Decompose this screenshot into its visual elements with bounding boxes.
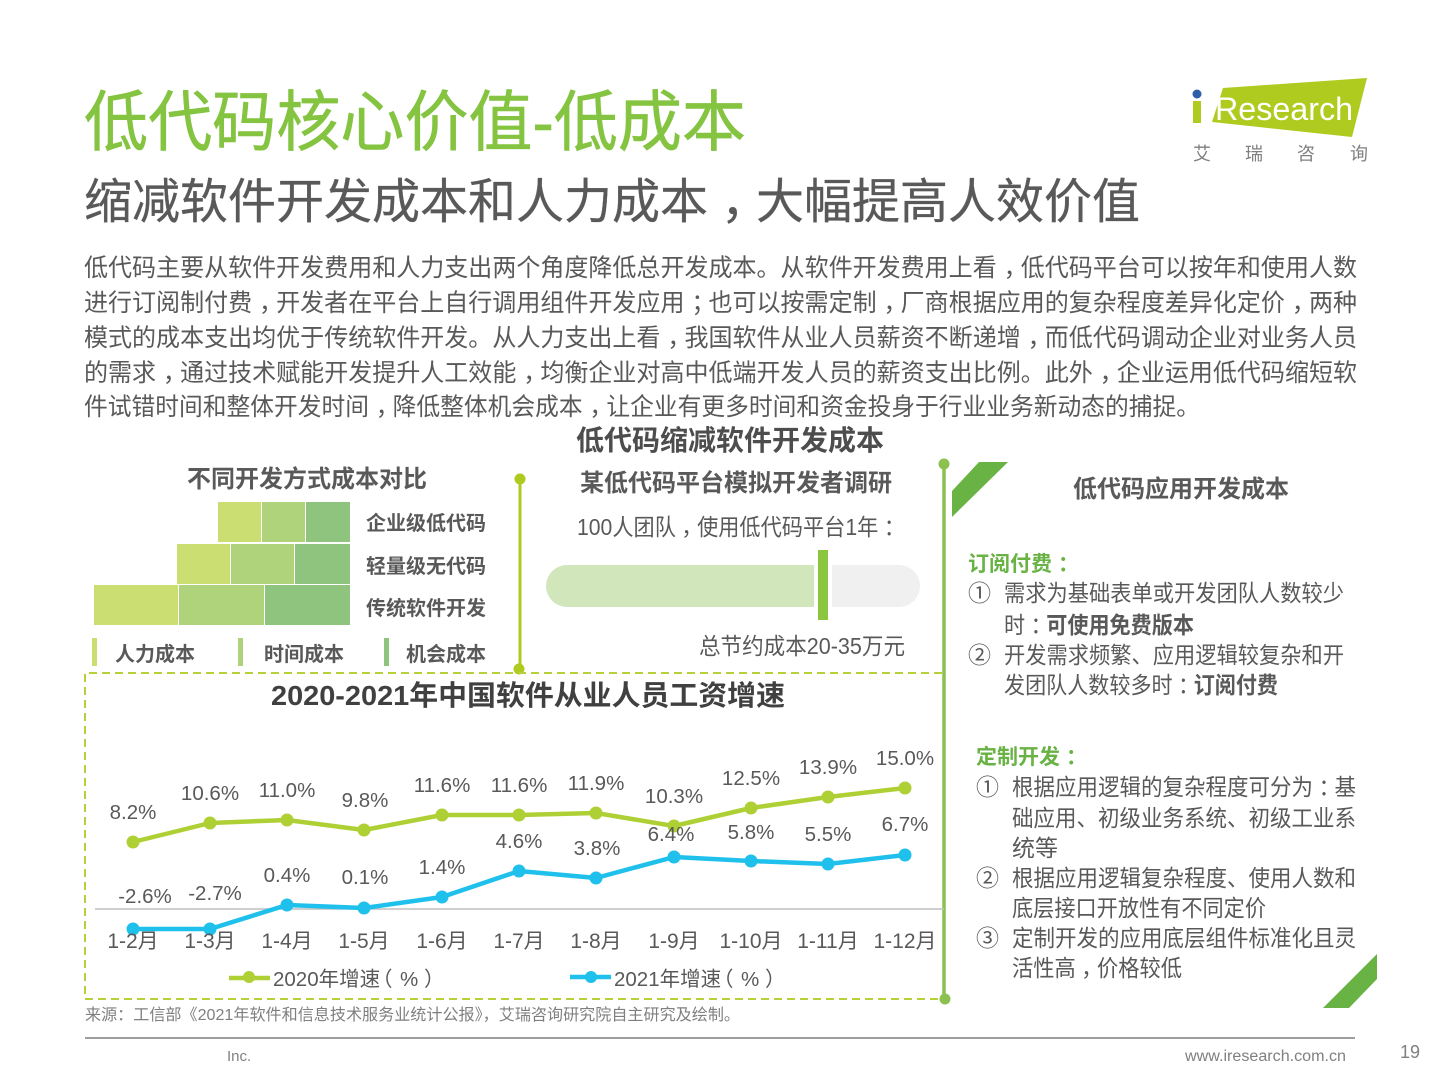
custom development section: ② xyxy=(976,865,999,891)
x axis labels: 1-5月 xyxy=(338,930,390,953)
logo: iResearch: 询 xyxy=(1350,144,1368,164)
data labels: 2020: 12.5% xyxy=(722,767,780,790)
savings label: 总节约成本20-35万元 xyxy=(699,633,905,659)
panel: salary growth chart xyxy=(85,673,944,999)
intro text block: 低代码主要从软件开发费用和人力支出两个角度降低总开发成本。从软件开发费用上看，低代码平台可以按年和使用人数 xyxy=(84,254,1357,282)
custom development section: 活性高，价格较低 xyxy=(1012,955,1182,981)
x axis labels: 1-10月 xyxy=(719,930,783,953)
panel: developer survey xyxy=(546,469,920,659)
logo: iResearch: Research xyxy=(1215,91,1353,127)
line: 2020 xyxy=(126,782,912,848)
data labels: 2020: 11.9% xyxy=(568,772,624,795)
x axis labels: 1-2月 xyxy=(107,930,159,953)
intro text block: 的需求，通过技术赋能开发提升人工效能，均衡企业对高中低端开发人员的薪资支出比例。此外，企业运用低代码缩短软 xyxy=(84,359,1357,387)
divider: left vertical xyxy=(514,474,526,674)
heading: application cost: 低代码应用开发成本 xyxy=(1073,476,1289,503)
legend: 2021: 2021年增速 xyxy=(614,968,721,991)
x axis labels: 1-3月 xyxy=(184,930,236,953)
x axis labels: 1-8月 xyxy=(570,930,622,953)
footer: website: www.iresearch.com.cn xyxy=(1184,1048,1346,1065)
stacked blocks: traditional development xyxy=(94,585,350,625)
x axis labels: 1-9月 xyxy=(648,930,700,953)
data labels: 2021: -2.7% xyxy=(188,882,242,905)
data labels: 2020: 10.3% xyxy=(645,785,703,808)
logo: iResearch: 艾 xyxy=(1193,144,1211,164)
legend: 2020 xyxy=(229,968,444,991)
legend: cost types: 机会成本 xyxy=(406,642,486,666)
x axis labels xyxy=(107,930,937,953)
data labels: 2020: 9.8% xyxy=(342,789,388,812)
data labels: 2021: 6.7% xyxy=(882,813,928,836)
logo: iResearch: 瑞 xyxy=(1245,144,1263,164)
subscription section: ① xyxy=(968,580,991,606)
data labels: 2021: 0.4% xyxy=(264,864,310,887)
x axis labels: 1-4月 xyxy=(261,930,313,953)
legend: 2020: 2020年增速 xyxy=(273,968,380,991)
legend: cost types: 时间成本 xyxy=(264,642,344,666)
intro text block xyxy=(84,254,1357,421)
legend: cost types: 人力成本 xyxy=(115,642,195,666)
data labels: 2020: 11.6% xyxy=(414,774,470,797)
row labels: 轻量级无代码 xyxy=(366,555,486,578)
custom development section xyxy=(976,745,1356,981)
subscription section: 开发需求频繁、应用逻辑较复杂和开 xyxy=(1004,642,1344,668)
data labels: 2020: 8.2% xyxy=(110,801,156,824)
data labels: 2021: 6.4% xyxy=(648,823,694,846)
data labels: 2021: 5.8% xyxy=(728,821,774,844)
custom development section: ① xyxy=(976,774,999,800)
intro text block: 件试错时间和整体开发时间，降低整体机会成本，让企业有更多时间和资金投身于行业业务新动态的捕捉。 xyxy=(84,393,1200,421)
corner accent: bottom xyxy=(1323,954,1377,1008)
stacked blocks: enterprise low code xyxy=(218,502,350,542)
legend: 2021 xyxy=(570,968,786,991)
legend: cost types xyxy=(92,638,486,666)
subscription section: 需求为基础表单或开发团队人数较少 xyxy=(1004,580,1344,606)
axis line xyxy=(95,908,944,910)
survey condition: 100人团队，使用低代码平台1年： xyxy=(577,514,905,540)
custom development section: 统等 xyxy=(1012,835,1058,861)
page number: 19 xyxy=(1400,1042,1420,1062)
custom development section: 础应用、初级业务系统、初级工业系 xyxy=(1012,805,1356,831)
row labels: 企业级低代码 xyxy=(366,511,486,535)
data labels: 2021: 5.5% xyxy=(805,823,851,846)
data labels: 2020: 11.6% xyxy=(491,774,547,797)
legend: 2021: （ xyxy=(713,968,734,991)
intro text block: 进行订阅制付费，开发者在平台上自行调用组件开发应用；也可以按需定制，厂商根据应用的复杂程度差异化定价，两种 xyxy=(84,289,1357,317)
subtitle: 缩减软件开发成本和人力成本 ，大幅提高人效价值 xyxy=(84,176,1140,229)
legend: 2021: % xyxy=(741,968,759,991)
progress bar xyxy=(546,550,920,620)
data labels: 2020 xyxy=(110,747,934,824)
data labels: 2020: 10.6% xyxy=(181,782,239,805)
data labels: 2020: 15.0% xyxy=(876,747,934,770)
corner accent: top xyxy=(952,462,1008,517)
data labels: 2021: 3.8% xyxy=(574,837,620,860)
heading: survey: 某低代码平台模拟开发者调研 xyxy=(580,469,892,497)
legend: 2020: ） xyxy=(424,968,444,991)
heading: cost reduction: 低代码缩减软件开发成本 xyxy=(576,425,884,456)
custom development section: 定制开发的应用底层组件标准化且灵 xyxy=(1012,925,1356,951)
data labels: 2021: 4.6% xyxy=(496,830,542,853)
intro text block: 模式的成本支出均优于传统软件开发。从人力支出上看，我国软件从业人员薪资不断递增，而低代码调动企业对业务人员 xyxy=(84,324,1357,352)
row labels xyxy=(366,511,486,620)
logo: iResearch: 咨 xyxy=(1297,144,1315,164)
custom development section: ③ xyxy=(976,925,999,951)
custom development section: 根据应用逻辑的复杂程度可分为：基 xyxy=(1012,774,1356,800)
data labels: 2021 xyxy=(118,813,928,908)
title: 低代码核心价值-低成本 xyxy=(84,85,746,159)
footer rule xyxy=(85,1037,1355,1039)
stacked blocks: lightweight no code xyxy=(177,544,350,584)
footer: company: Inc. xyxy=(227,1048,251,1065)
subscription section: 时：可使用免费版本 xyxy=(1004,612,1194,638)
legend: 2020: （ xyxy=(372,968,392,991)
divider: right vertical xyxy=(938,458,950,1004)
legend: 2020: % xyxy=(400,968,418,991)
data labels: 2020: 11.0% xyxy=(259,779,315,802)
data labels: 2021: 0.1% xyxy=(342,866,388,889)
line: 2021 xyxy=(126,848,912,936)
custom development section: 定制开发 ： xyxy=(976,745,1087,769)
subscription section: 发团队人数较多时：订阅付费 xyxy=(1004,672,1278,698)
subscription section: 订阅付费 ： xyxy=(968,553,1079,576)
data labels: 2021: -2.6% xyxy=(118,885,172,908)
x axis labels: 1-12月 xyxy=(873,930,937,953)
custom development section: 根据应用逻辑复杂程度、使用人数和 xyxy=(1012,865,1356,891)
data labels: 2020: 13.9% xyxy=(799,756,857,779)
subscription section xyxy=(968,553,1344,698)
x axis labels: 1-11月 xyxy=(797,930,859,953)
chart title: 2020-2021年中国软件从业人员工资增速 xyxy=(271,680,785,711)
panel: cost comparison xyxy=(92,465,486,666)
panel: application development cost xyxy=(952,462,1377,1008)
custom development section: 底层接口开放性有不同定价 xyxy=(1012,895,1266,921)
dashed frame xyxy=(85,673,942,999)
logo: iResearch xyxy=(1192,78,1368,164)
data labels: 2021: 1.4% xyxy=(419,856,465,879)
legend: 2021: ） xyxy=(765,968,786,991)
source note: 来源：工信部《2021年软件和信息技术服务业统计公报》，艾瑞咨询研究院自主研究及绘制。 xyxy=(85,1006,740,1024)
row labels: 传统软件开发 xyxy=(366,596,486,620)
heading: comparison: 不同开发方式成本对比 xyxy=(187,465,427,493)
x axis labels: 1-7月 xyxy=(493,930,545,953)
subscription section: ② xyxy=(968,642,991,668)
x axis labels: 1-6月 xyxy=(416,930,468,953)
